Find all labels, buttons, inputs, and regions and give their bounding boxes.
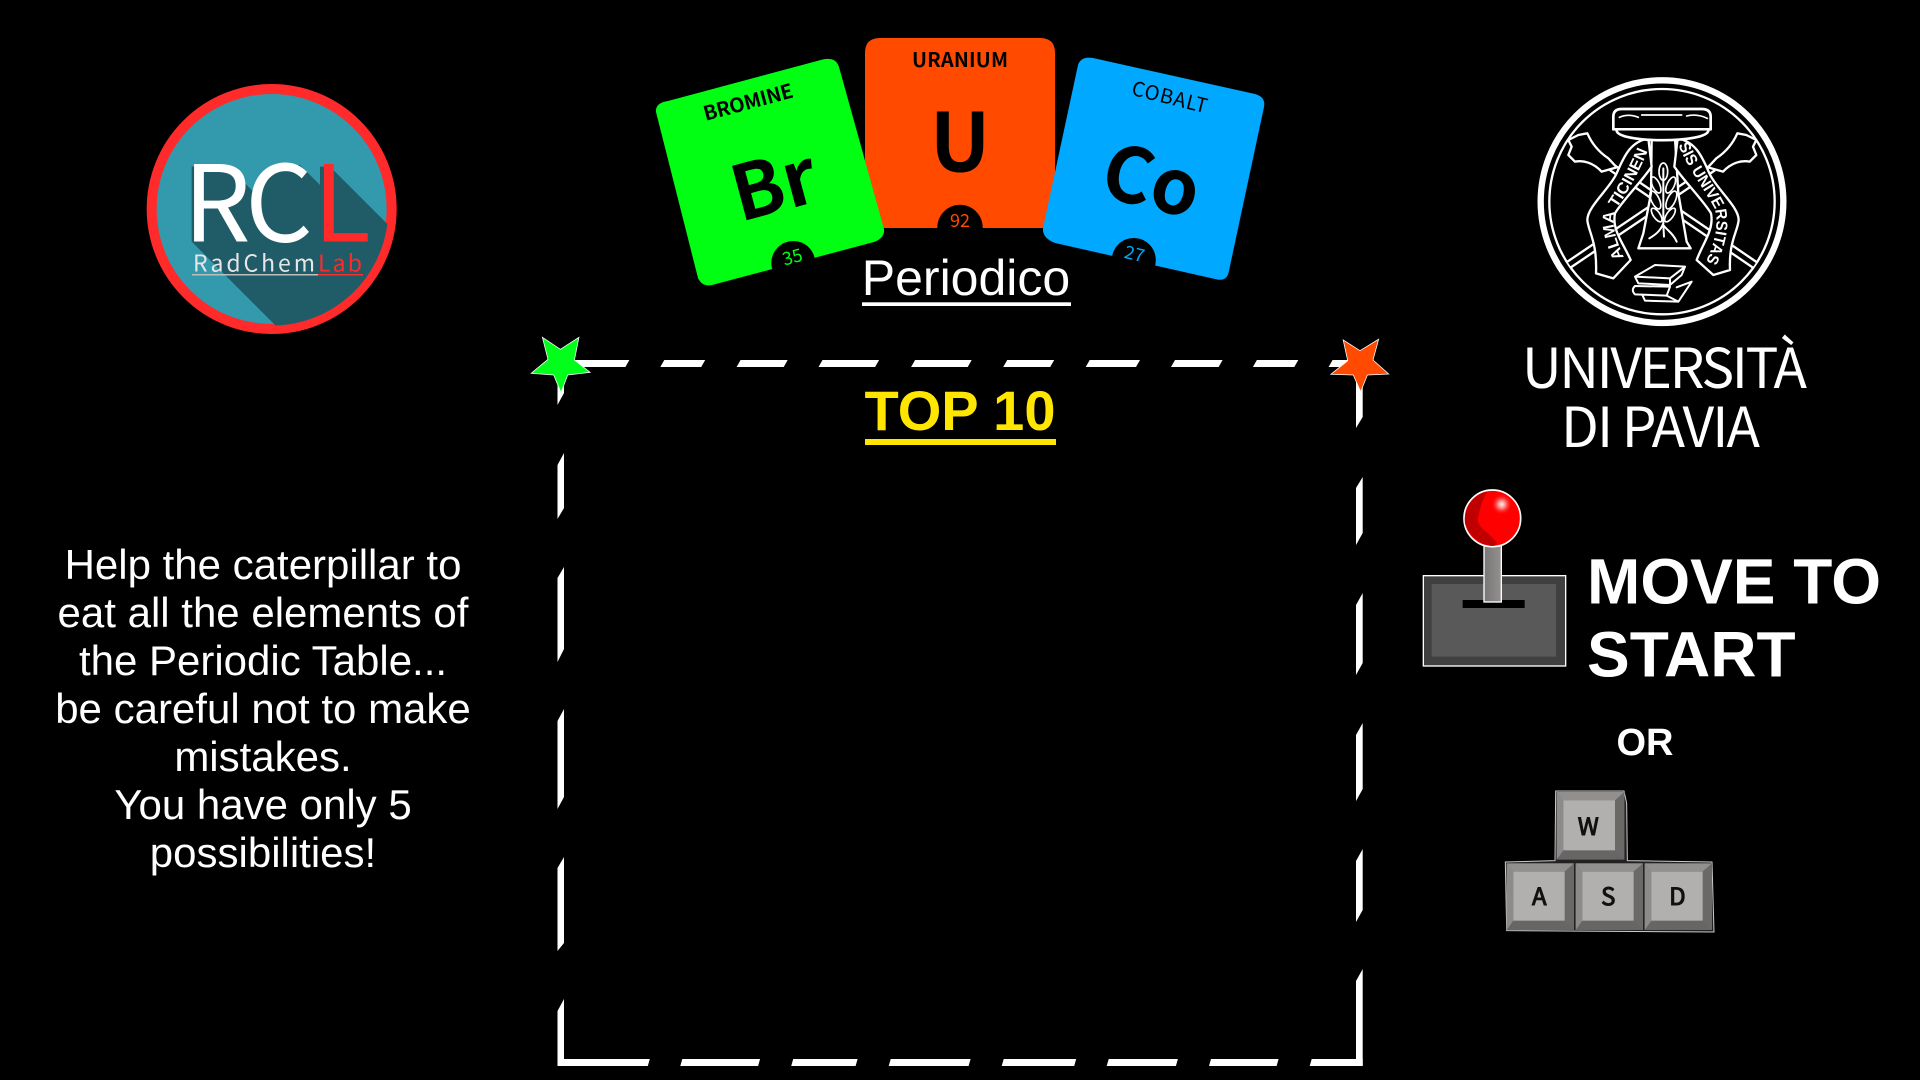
key: W: W [1578, 807, 1599, 842]
card: cobalt: COBALT [1129, 72, 1211, 119]
logo: RadChemLab: L [313, 119, 371, 273]
instructions text: eat all the elements of [58, 589, 469, 636]
card: bromine [656, 59, 884, 285]
card: bromine: 35 [779, 241, 805, 271]
instructions text: possibilities! [150, 829, 376, 876]
key: D [1645, 863, 1712, 930]
card: bromine: Br [717, 115, 829, 243]
title: Periodico: Periodico [862, 250, 1070, 306]
university name [1522, 324, 1808, 463]
instructions text: Help the caterpillar to [65, 541, 461, 588]
key: A [1507, 863, 1574, 930]
dashed border: top 10 panel [558, 360, 1363, 1066]
seal motto: SIS UNIVERSITAS [1680, 142, 1728, 264]
university name: DI PAVIA [1561, 383, 1761, 463]
card: uranium: URANIUM [912, 44, 1008, 73]
logo: RadChemLab: C [245, 119, 313, 273]
key: S [1576, 863, 1643, 930]
text: or: OR [1616, 722, 1674, 764]
card: cobalt [1043, 58, 1264, 282]
icon: WASD keys [1505, 791, 1714, 932]
instructions text: mistakes. [174, 733, 352, 780]
logo: RadChemLab [152, 89, 400, 350]
text: move to start: START [1587, 618, 1796, 690]
icon: orange star [1331, 339, 1389, 392]
instructions text: You have only 5 [114, 781, 412, 828]
key: A: A [1532, 877, 1547, 912]
text: move to start [1587, 546, 1881, 690]
card: bromine: BROMINE [700, 75, 796, 127]
heading: TOP 10: TOP 10 [865, 379, 1055, 442]
title logo: element cards [656, 38, 1264, 285]
card: uranium: 92 [950, 207, 970, 233]
logo: University of Pavia seal [1538, 77, 1786, 326]
university name: UNIVERSITÀ [1522, 324, 1808, 404]
logo: RadChemLab: RadChem [193, 244, 315, 278]
card: cobalt: 27 [1122, 238, 1148, 268]
key: W [1557, 792, 1624, 860]
key: S: S [1601, 877, 1615, 912]
instructions text: be careful not to make [55, 685, 471, 732]
seal motto [1602, 142, 1728, 264]
instructions text: the Periodic Table... [79, 637, 447, 684]
logo: RadChemLab: Lab [318, 244, 362, 278]
seal motto: ALMA TICINEN [1602, 148, 1648, 258]
text: move to start: MOVE TO [1587, 546, 1881, 618]
card: cobalt: Co [1092, 110, 1214, 240]
card: uranium [865, 38, 1055, 250]
key: D: D [1669, 877, 1686, 912]
logo: RadChemLab: R [183, 119, 251, 273]
instructions text [55, 541, 471, 876]
icon: green star [531, 337, 590, 393]
card: uranium: U [930, 78, 990, 196]
icon: joystick [1423, 490, 1566, 666]
